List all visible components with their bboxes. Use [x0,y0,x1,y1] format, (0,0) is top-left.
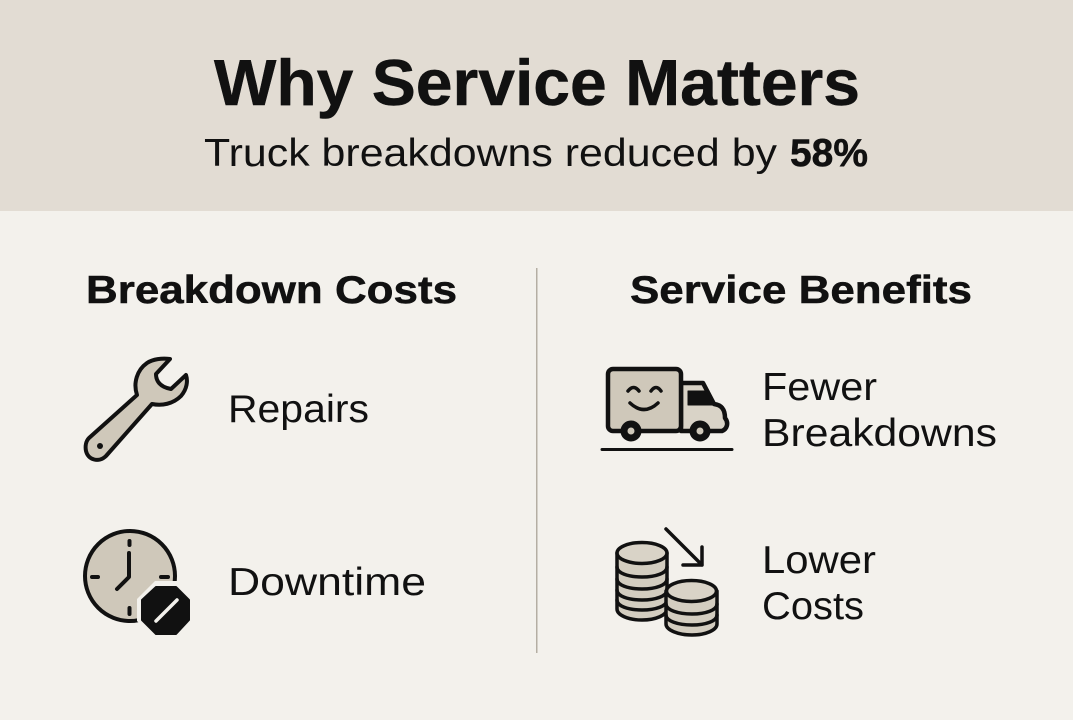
label: fewer breakdowns: Fewer [762,366,877,409]
title: Why Service Matters [214,46,860,119]
header banner [0,0,1073,211]
label: downtime: Downtime [228,561,426,604]
divider [536,268,538,653]
label: fewer breakdowns: Breakdowns [762,412,997,455]
label: repairs: Repairs [228,388,369,431]
label: lower costs: Lower [762,539,876,582]
icon: clock with stop sign [85,531,195,639]
heading: breakdown costs: Breakdown Costs [86,269,457,312]
label: lower costs [762,539,876,628]
icon: wrench [86,359,187,460]
subtitle: 58% [790,132,868,175]
panel: service benefits [602,269,997,635]
label: fewer breakdowns [762,366,997,455]
icon: smiling truck [602,369,732,450]
label: lower costs: Costs [762,585,864,628]
icon: coin stacks with down arrow [617,529,717,635]
panel: breakdown costs [85,269,457,639]
heading: service benefits: Service Benefits [630,269,972,312]
subtitle: Truck breakdowns reduced by [204,132,778,175]
